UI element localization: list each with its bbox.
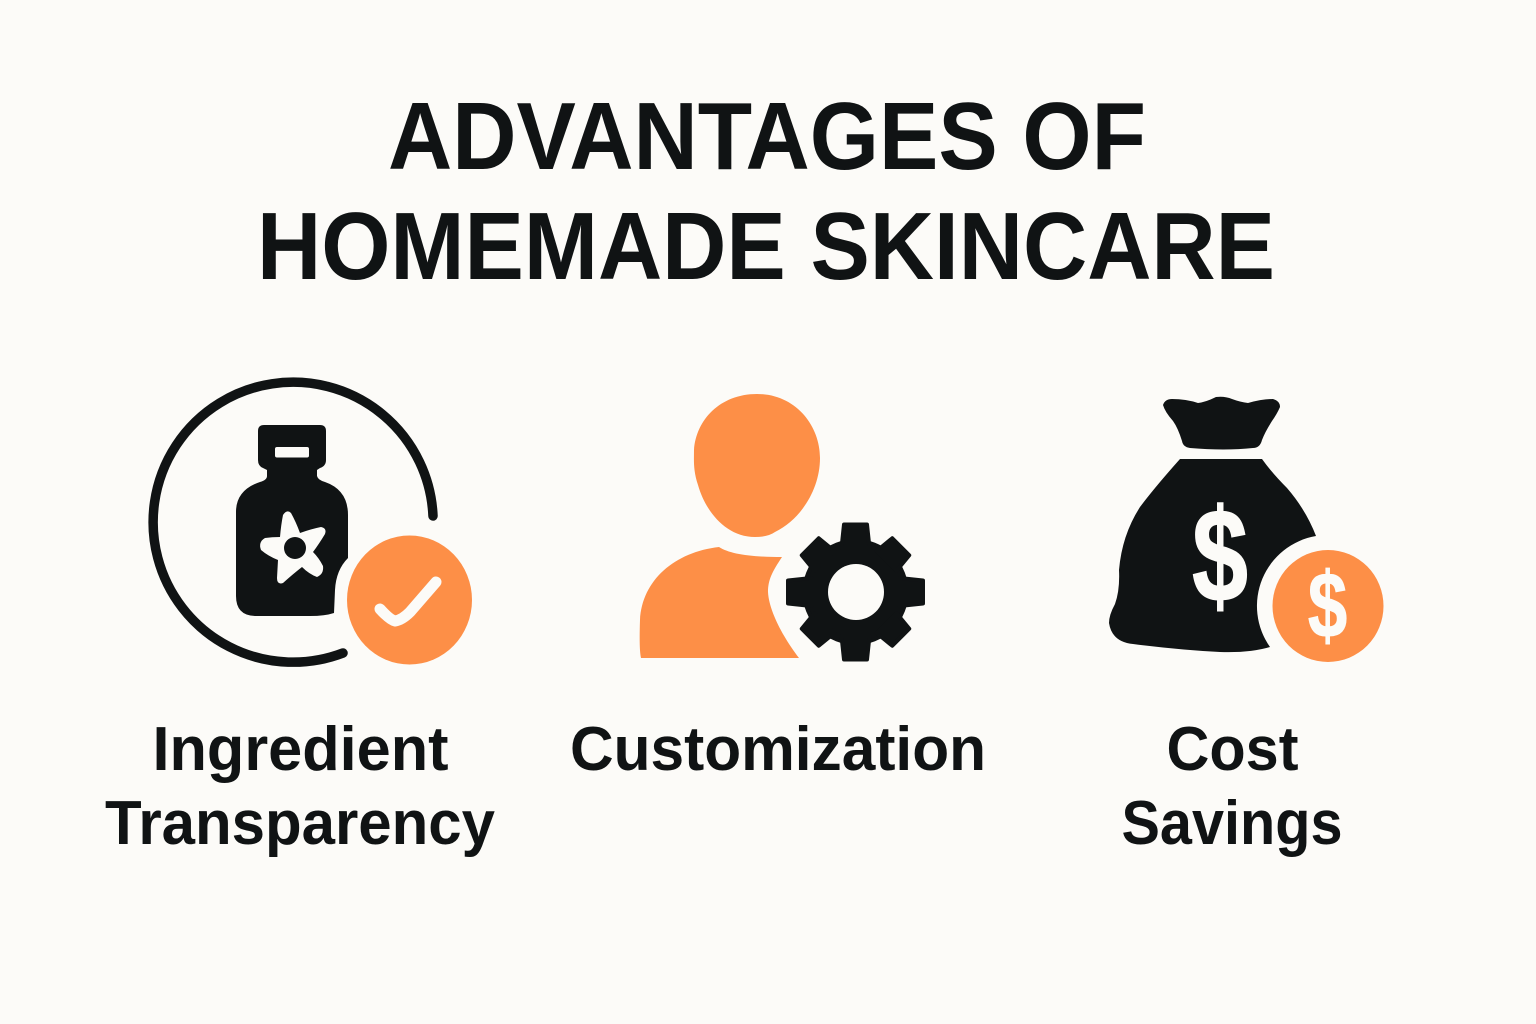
- title: ADVANTAGES OF: [388, 83, 1146, 190]
- icon: money bag with coin: $: [1192, 482, 1248, 629]
- title: [257, 83, 1275, 300]
- label: ingredient transparency: Transparency: [105, 789, 495, 858]
- label: ingredient transparency: Ingredient: [152, 715, 448, 784]
- icon: bottle with check: [153, 382, 472, 664]
- label: cost savings: Cost: [1166, 715, 1298, 784]
- label: customization: Customization: [570, 715, 986, 784]
- label: cost savings: Savings: [1122, 789, 1342, 858]
- label: cost savings: [1122, 715, 1342, 858]
- icon: money bag with coin: $: [1308, 553, 1347, 657]
- icon: money bag with coin: [1109, 397, 1384, 662]
- icon: person with gear: [640, 394, 923, 660]
- label: ingredient transparency: [105, 715, 495, 858]
- title: HOMEMADE SKINCARE: [257, 193, 1275, 300]
